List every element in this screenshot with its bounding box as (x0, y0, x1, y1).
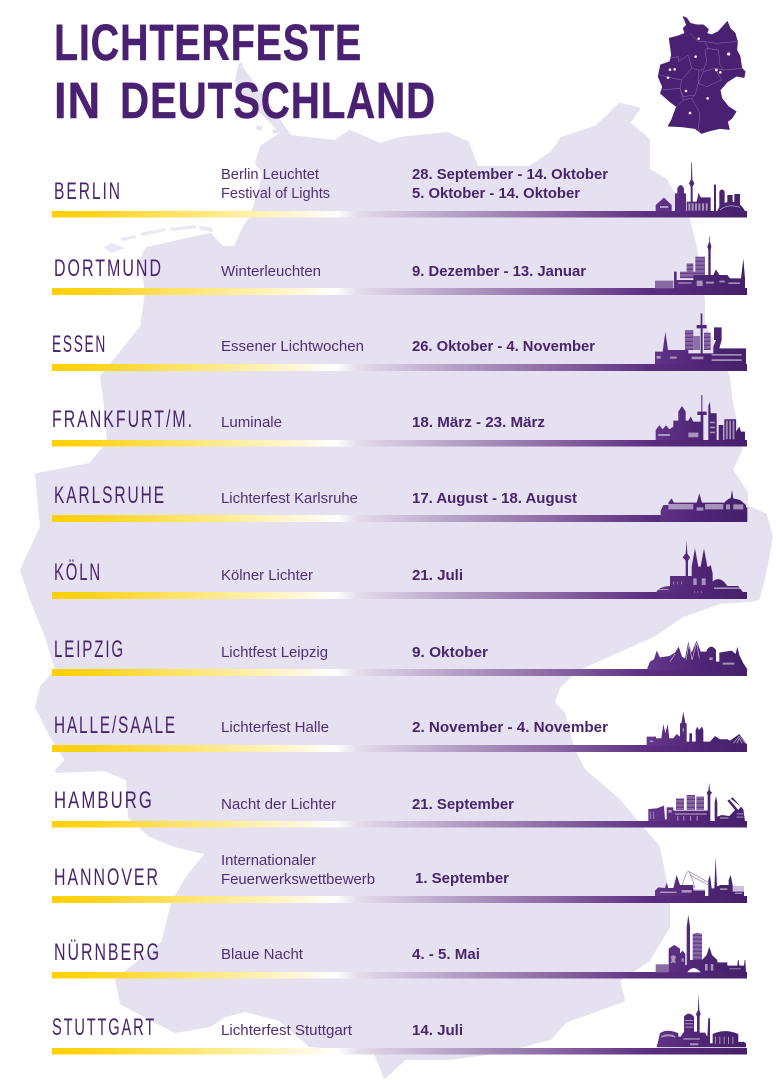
gradient bar: Halle (52, 745, 747, 752)
city: Frankfurt: FRANKFURT/M. (52, 406, 194, 433)
event: Hannover (221, 853, 375, 888)
row: Hannover (52, 853, 747, 903)
skyline: Frankfurt (656, 395, 745, 440)
city: Hamburg: HAMBURG (54, 787, 154, 814)
gradient bar: Leipzig (52, 669, 747, 676)
event: Köln: Kölner Lichter (221, 568, 313, 584)
city: Köln: KÖLN (54, 559, 102, 586)
event: Karlsruhe: Lichterfest Karlsruhe (221, 491, 358, 507)
date: Karlsruhe: 17. August - 18. August (412, 491, 577, 507)
city: Hannover: HANNOVER (54, 864, 160, 891)
row: Dortmund (52, 237, 747, 295)
events: Berlin: Festival of Lights (221, 186, 330, 202)
skyline: Köln (656, 540, 743, 593)
skyline: Hannover (655, 857, 744, 896)
date: Stuttgart: 14. Juli (412, 1023, 463, 1039)
row: Köln (52, 540, 747, 599)
skyline: Dortmund (655, 237, 745, 288)
row: Leipzig (52, 636, 747, 676)
skyline: Hamburg (648, 783, 745, 821)
row: Halle (52, 712, 747, 752)
city: Karlsruhe: KARLSRUHE (54, 482, 166, 509)
title: LICHTERFESTE (54, 14, 362, 71)
event: Dortmund: Winterleuchten (221, 264, 321, 280)
skyline: Karlsruhe (661, 490, 747, 522)
gradient bar: Hannover (52, 896, 747, 903)
date: Hamburg: 21. September (412, 797, 514, 813)
row: Nürnberg (52, 915, 747, 978)
city: Nürnberg: NÜRNBERG (54, 939, 161, 966)
date: Halle: 2. November - 4. November (412, 720, 608, 736)
dates: Berlin (412, 167, 608, 202)
row: Essen (52, 313, 747, 371)
gradient bar: Hamburg (52, 821, 747, 828)
event: Hannover: Feuerwerkswettbewerb (221, 872, 375, 888)
gradient bar: Nürnberg (52, 972, 747, 978)
title: IN (54, 72, 101, 129)
skyline: Halle (647, 712, 747, 746)
dates: Berlin: 5. Oktober - 14. Oktober (412, 186, 580, 202)
skyline: Essen (655, 313, 746, 364)
date: Hannover: 1. September (415, 871, 509, 887)
date: Leipzig: 9. Oktober (412, 645, 488, 661)
row: Frankfurt (52, 395, 747, 446)
row: Hamburg (52, 783, 747, 828)
gradient bar: Dortmund (52, 288, 747, 295)
event: Hamburg: Nacht der Lichter (221, 797, 336, 813)
title: DEUTSCHLAND (120, 72, 436, 129)
gradient bar: Berlin (52, 211, 747, 218)
skyline: Berlin (656, 163, 745, 211)
skyline: Nürnberg (656, 915, 746, 972)
gradient bar: Karlsruhe (52, 515, 747, 522)
event: Stuttgart: Lichterfest Stuttgart (221, 1023, 352, 1039)
event: Frankfurt: Luminale (221, 415, 282, 431)
event: Nürnberg: Blaue Nacht (221, 947, 303, 963)
skyline: Stuttgart (657, 993, 746, 1047)
event: Leipzig: Lichtfest Leipzig (221, 645, 328, 661)
city: Halle: HALLE/SAALE (54, 712, 177, 739)
gradient bar: Köln (52, 592, 747, 599)
gradient bar: Frankfurt (52, 440, 747, 446)
event: Essen: Essener Lichtwochen (221, 339, 364, 355)
city: Berlin: BERLIN (54, 178, 122, 205)
city: Essen: ESSEN (52, 331, 107, 358)
events: Berlin: Berlin Leuchtet (221, 167, 319, 183)
dates: Berlin: 28. September - 14. Oktober (412, 167, 608, 183)
icon: small map of Germany with city dots (658, 17, 745, 133)
city: Stuttgart: STUTTGART (52, 1014, 156, 1041)
city: Leipzig: LEIPZIG (54, 636, 125, 663)
row: Stuttgart (52, 993, 747, 1054)
gradient bar: Stuttgart (52, 1048, 747, 1054)
row: Karlsruhe (52, 482, 747, 522)
gradient bar: Essen (52, 364, 747, 371)
skyline: Leipzig (647, 641, 747, 670)
event: Hannover: Internationaler (221, 853, 316, 869)
date: Nürnberg: 4. - 5. Mai (412, 947, 480, 963)
date: Frankfurt: 18. März - 23. März (412, 415, 545, 431)
events: Berlin (221, 167, 330, 202)
city: Dortmund: DORTMUND (54, 255, 163, 282)
date: Köln: 21. Juli (412, 568, 463, 584)
event: Halle: Lichterfest Halle (221, 720, 329, 736)
row: Berlin (52, 163, 747, 218)
title (54, 14, 436, 129)
date: Essen: 26. Oktober - 4. November (412, 339, 595, 355)
date: Dortmund: 9. Dezember - 13. Januar (412, 264, 586, 280)
